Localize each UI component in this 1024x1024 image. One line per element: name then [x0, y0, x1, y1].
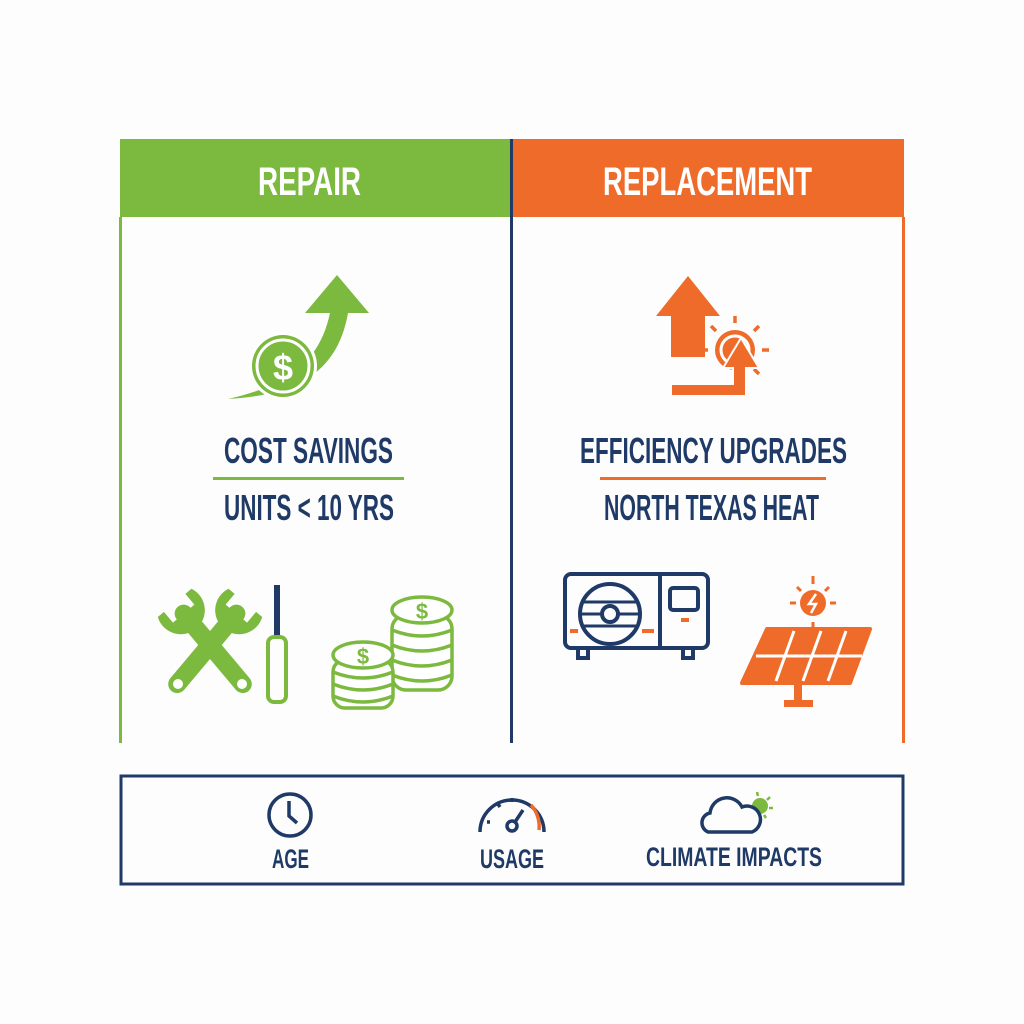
header: replacement: REPLACEMENT	[603, 160, 812, 204]
icon: clock	[269, 794, 311, 836]
text: climate impacts: CLIMATE IMPACTS	[646, 842, 822, 872]
divider	[510, 139, 513, 743]
icon: coin with rising arrow: $	[273, 347, 293, 388]
panel: repair	[119, 139, 511, 743]
text: age: AGE	[272, 844, 309, 874]
icon: efficiency arrow with sun	[656, 276, 769, 396]
panel: replacement	[513, 139, 905, 743]
panel: factors	[121, 776, 903, 884]
text: efficiency upgrades: EFFICIENCY UPGRADES	[580, 430, 847, 471]
header: repair	[120, 139, 511, 217]
icon: coin with rising arrow	[228, 275, 369, 400]
icon: coin stacks	[333, 597, 452, 708]
icon: solar panel with sun	[742, 576, 870, 707]
icon: wrenches and screwdriver	[153, 585, 286, 706]
icon: gauge	[480, 798, 544, 832]
icon: ac unit	[565, 574, 708, 658]
text: cost savings: COST SAVINGS	[224, 430, 393, 471]
text: north texas heat: NORTH TEXAS HEAT	[604, 487, 819, 528]
text: units < 10 yrs: UNITS < 10 YRS	[224, 487, 394, 528]
text: usage: USAGE	[480, 844, 544, 874]
icon: cloud with sun	[702, 792, 773, 832]
icon: coin stacks: $	[357, 644, 369, 669]
header: replacement	[513, 139, 904, 217]
header: repair: REPAIR	[258, 160, 361, 204]
icon: coin stacks: $	[416, 599, 428, 624]
